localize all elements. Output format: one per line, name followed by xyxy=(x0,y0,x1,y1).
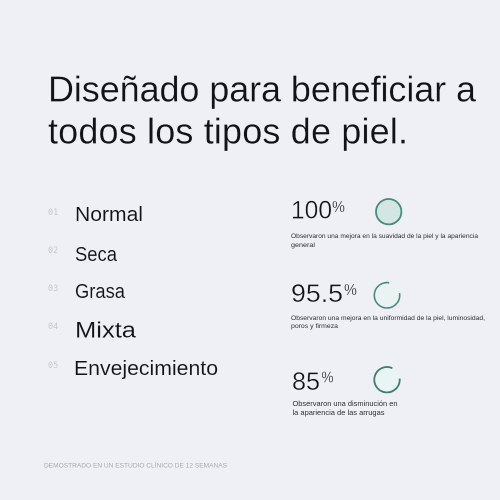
description 100% xyxy=(291,233,478,249)
stat value 85% xyxy=(292,368,334,396)
description 100%: Observaron una mejora en la suavidad de la piel y la apariencia xyxy=(291,233,478,240)
skin type: Mixta xyxy=(48,318,137,342)
skin type: Normal: 01 xyxy=(48,208,58,218)
footnote: DEMOSTRADO EN UN ESTUDIO CLÍNICO DE 12 SEMANAS xyxy=(44,460,227,470)
description 85%: Observaron una disminución en xyxy=(292,399,398,408)
skin type: Mixta: 04 xyxy=(48,322,58,332)
stat value 85%: % xyxy=(322,370,334,386)
description 95.5%: poros y firmeza xyxy=(291,323,338,330)
skin type: Seca: Seca xyxy=(75,243,118,266)
stat value 95.5%: 95.5 xyxy=(291,280,343,308)
skin type: Seca: 02 xyxy=(48,246,58,256)
title xyxy=(48,68,477,152)
skin type: Grasa: 03 xyxy=(48,284,58,294)
description 95.5%: Observaron una mejora en la uniformidad de la piel, luminosidad, xyxy=(291,315,485,322)
description 100%: general xyxy=(291,242,316,249)
skin type: Envejecimiento: Envejecimiento xyxy=(74,357,218,380)
skin type: Grasa xyxy=(48,280,126,303)
title: Diseñado para beneficiar a xyxy=(48,68,477,110)
skin type: Normal: Normal xyxy=(75,203,143,226)
description 95.5% xyxy=(291,315,485,330)
skin type: Normal xyxy=(48,203,143,226)
stat value 100%: % xyxy=(332,199,345,216)
progress ring 85% xyxy=(374,367,400,392)
skin type: Seca xyxy=(48,243,118,266)
stat value 85%: 85 xyxy=(292,368,320,396)
title: todos los tipos de piel. xyxy=(48,110,408,152)
stat: 85% xyxy=(292,367,400,417)
stat: 95.5% xyxy=(291,280,485,330)
skin type list xyxy=(48,203,218,380)
stat value 95.5%: % xyxy=(344,282,357,299)
progress ring 95.5% xyxy=(374,283,400,308)
skin type: Mixta: Mixta xyxy=(75,318,137,342)
progress ring 100% xyxy=(376,199,401,224)
stat: 100% xyxy=(291,196,478,249)
stat value 100%: 100 xyxy=(291,196,332,224)
description 85% xyxy=(292,399,398,417)
description 85%: la apariencia de las arrugas xyxy=(292,408,385,417)
skin type: Envejecimiento: 05 xyxy=(48,361,58,371)
skin type: Grasa: Grasa xyxy=(75,280,126,303)
